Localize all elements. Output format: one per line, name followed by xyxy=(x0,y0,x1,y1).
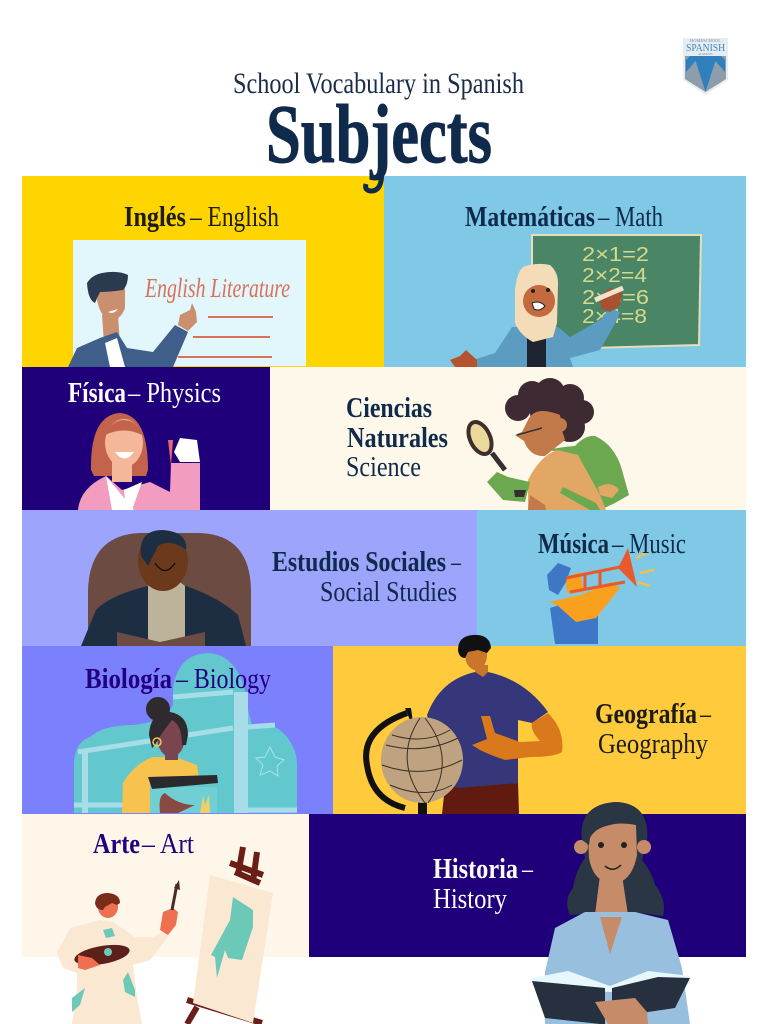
illustration: trumpet player xyxy=(547,548,654,644)
panel: Inglés background xyxy=(22,176,384,367)
illustration: physics scientist xyxy=(78,413,200,510)
label: Música – Music xyxy=(538,529,686,560)
illustration: math teacher at chalkboard: 2×2=4 xyxy=(582,265,647,287)
label: Geografía – Geography xyxy=(595,699,712,760)
panel: Biología background xyxy=(22,646,333,814)
label: Arte – Art: – Art xyxy=(141,829,194,860)
label: Historia – History: Historia xyxy=(433,854,518,885)
label: Ciencias Naturales Science xyxy=(346,393,448,483)
logo: Spanish academy shield: SPANISH xyxy=(686,43,725,54)
label: Música – Music: – Music xyxy=(611,529,686,560)
illustration: history woman reading xyxy=(532,802,690,1024)
label: Geografía – Geography: Geography xyxy=(598,729,708,760)
label: Arte – Art xyxy=(93,829,194,860)
illustration: social studies reader in armchair xyxy=(81,530,251,646)
label: Inglés – English xyxy=(124,201,279,233)
label: Geografía – Geography: Geografía xyxy=(595,699,697,730)
label: Historia – History: History xyxy=(433,884,507,915)
label: Biología – Biology: Biología xyxy=(85,664,172,695)
label: Física – Physics: Física xyxy=(68,378,126,409)
logo: Spanish academy shield xyxy=(683,38,728,95)
label: Música – Music: Música xyxy=(538,529,609,560)
label: Geografía – Geography: – xyxy=(699,699,712,730)
illustration: artist painting at easel xyxy=(57,847,273,1024)
panel: Geografía background xyxy=(333,646,746,814)
label: Ciencias Naturales Science: Naturales xyxy=(347,423,448,454)
title: School Vocabulary in Spanish: School Vocabulary in Spanish xyxy=(233,67,524,100)
illustration: science student with magnifier xyxy=(464,378,629,510)
label: Matemáticas – Math: Matemáticas xyxy=(465,201,595,233)
panel: Matemáticas background xyxy=(384,176,746,367)
heading: Subjects: Subjects xyxy=(266,88,492,181)
label: Inglés – English: Inglés xyxy=(124,201,186,233)
label: Estudios Sociales – Social Studies: – xyxy=(450,547,462,578)
label: Estudios Sociales – Social Studies: Social Studies xyxy=(320,577,457,608)
illustration: biology student with aquarium xyxy=(74,653,297,813)
label: Estudios Sociales – Social Studies: Estudios Sociales xyxy=(272,547,446,578)
logo: Spanish academy shield: HOMESCHOOL xyxy=(690,38,722,43)
label: Inglés – English: – English xyxy=(189,201,279,233)
illustration: geography student with globe xyxy=(366,635,562,814)
panel: Estudios Sociales background xyxy=(22,510,477,646)
illustration: English teacher at board xyxy=(68,240,306,367)
logo: Spanish academy shield: ACADEMY xyxy=(698,52,713,56)
label: Ciencias Naturales Science: Ciencias xyxy=(346,393,432,424)
illustration: math teacher at chalkboard: 2×4=8 xyxy=(582,306,647,328)
panel: Física background xyxy=(22,367,270,511)
label: Física – Physics xyxy=(68,378,221,409)
illustration: math teacher at chalkboard: 2×3=6 xyxy=(582,287,649,309)
label: Arte – Art: Arte xyxy=(93,829,140,860)
panel: Historia background xyxy=(309,814,746,957)
illustration: math teacher at chalkboard xyxy=(450,235,701,367)
illustration: math teacher at chalkboard: 2×1=2 xyxy=(582,244,649,266)
label: Historia – History xyxy=(433,854,534,915)
heading: Subjects xyxy=(266,88,492,191)
panel: Ciencias Naturales background xyxy=(270,367,746,511)
label: Física – Physics: – Physics xyxy=(127,378,221,409)
label: Biología – Biology: – Biology xyxy=(175,664,271,695)
label: Ciencias Naturales Science: Science xyxy=(346,452,421,483)
label: Estudios Sociales – Social Studies xyxy=(272,547,462,608)
panel: Arte background xyxy=(22,814,309,957)
label: Biología – Biology xyxy=(85,664,271,695)
label: Historia – History: – xyxy=(521,854,534,885)
illustration: English teacher at board: English Literature xyxy=(144,273,290,303)
label: Matemáticas – Math: – Math xyxy=(597,201,663,233)
panel: Música background xyxy=(477,510,746,646)
